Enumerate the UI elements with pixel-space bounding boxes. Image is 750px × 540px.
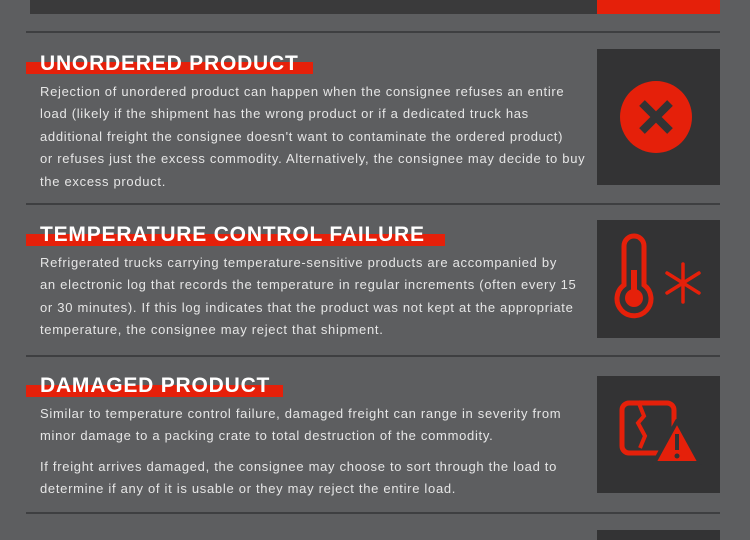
heading: UNORDERED PRODUCT: [40, 52, 299, 75]
section: unordered product: [26, 49, 720, 189]
body text: load (likely if the shipment has the wrong product or if a dedicated truck has: [40, 106, 529, 121]
body text: Rejection of unordered product can happen when the consignee refuses an entire: [40, 84, 564, 99]
icon: thermometer snowflake: [597, 220, 720, 338]
heading highlight: [26, 385, 283, 397]
heading: TEMPERATURE CONTROL FAILURE: [40, 223, 425, 246]
body text: the excess product.: [40, 174, 166, 189]
body text: or 30 minutes). If this log indicates that the product was not kept at the appropriate: [40, 300, 574, 315]
body text 2: If freight arrives damaged, the consignee may choose to sort through the load to: [40, 459, 557, 474]
body text: Similar to temperature control failure, damaged freight can range in severity from: [40, 406, 561, 421]
body text: minor damage to a packing crate to total destruction of the commodity.: [40, 428, 493, 443]
top bar: [30, 0, 597, 14]
body text: [40, 406, 561, 443]
heading highlight: [26, 62, 313, 74]
body text: or refuses just the excess commodity. Alternatively, the consignee may decide to buy: [40, 151, 585, 166]
icon: x circle: [597, 49, 720, 185]
body text: [40, 84, 585, 189]
heading: DAMAGED PRODUCT: [40, 374, 270, 397]
body text: [40, 255, 576, 337]
icon: broken box warning: [597, 376, 720, 493]
section: damaged product: [26, 374, 720, 496]
body text: Refrigerated trucks carrying temperature-sensitive products are accompanied by: [40, 255, 557, 270]
next icon box: [597, 530, 720, 540]
heading highlight: [26, 234, 445, 246]
body text: additional freight the consignee doesn't want to contaminate the ordered product): [40, 129, 563, 144]
body text 2: determine if any of it is usable or they may reject the entire load.: [40, 481, 456, 496]
section: temperature: [26, 220, 720, 338]
body text: an electronic log that records the temperature in regular increments (often every 15: [40, 277, 576, 292]
body text 2: [40, 459, 557, 496]
body text: temperature, the consignee may reject that shipment.: [40, 322, 384, 337]
